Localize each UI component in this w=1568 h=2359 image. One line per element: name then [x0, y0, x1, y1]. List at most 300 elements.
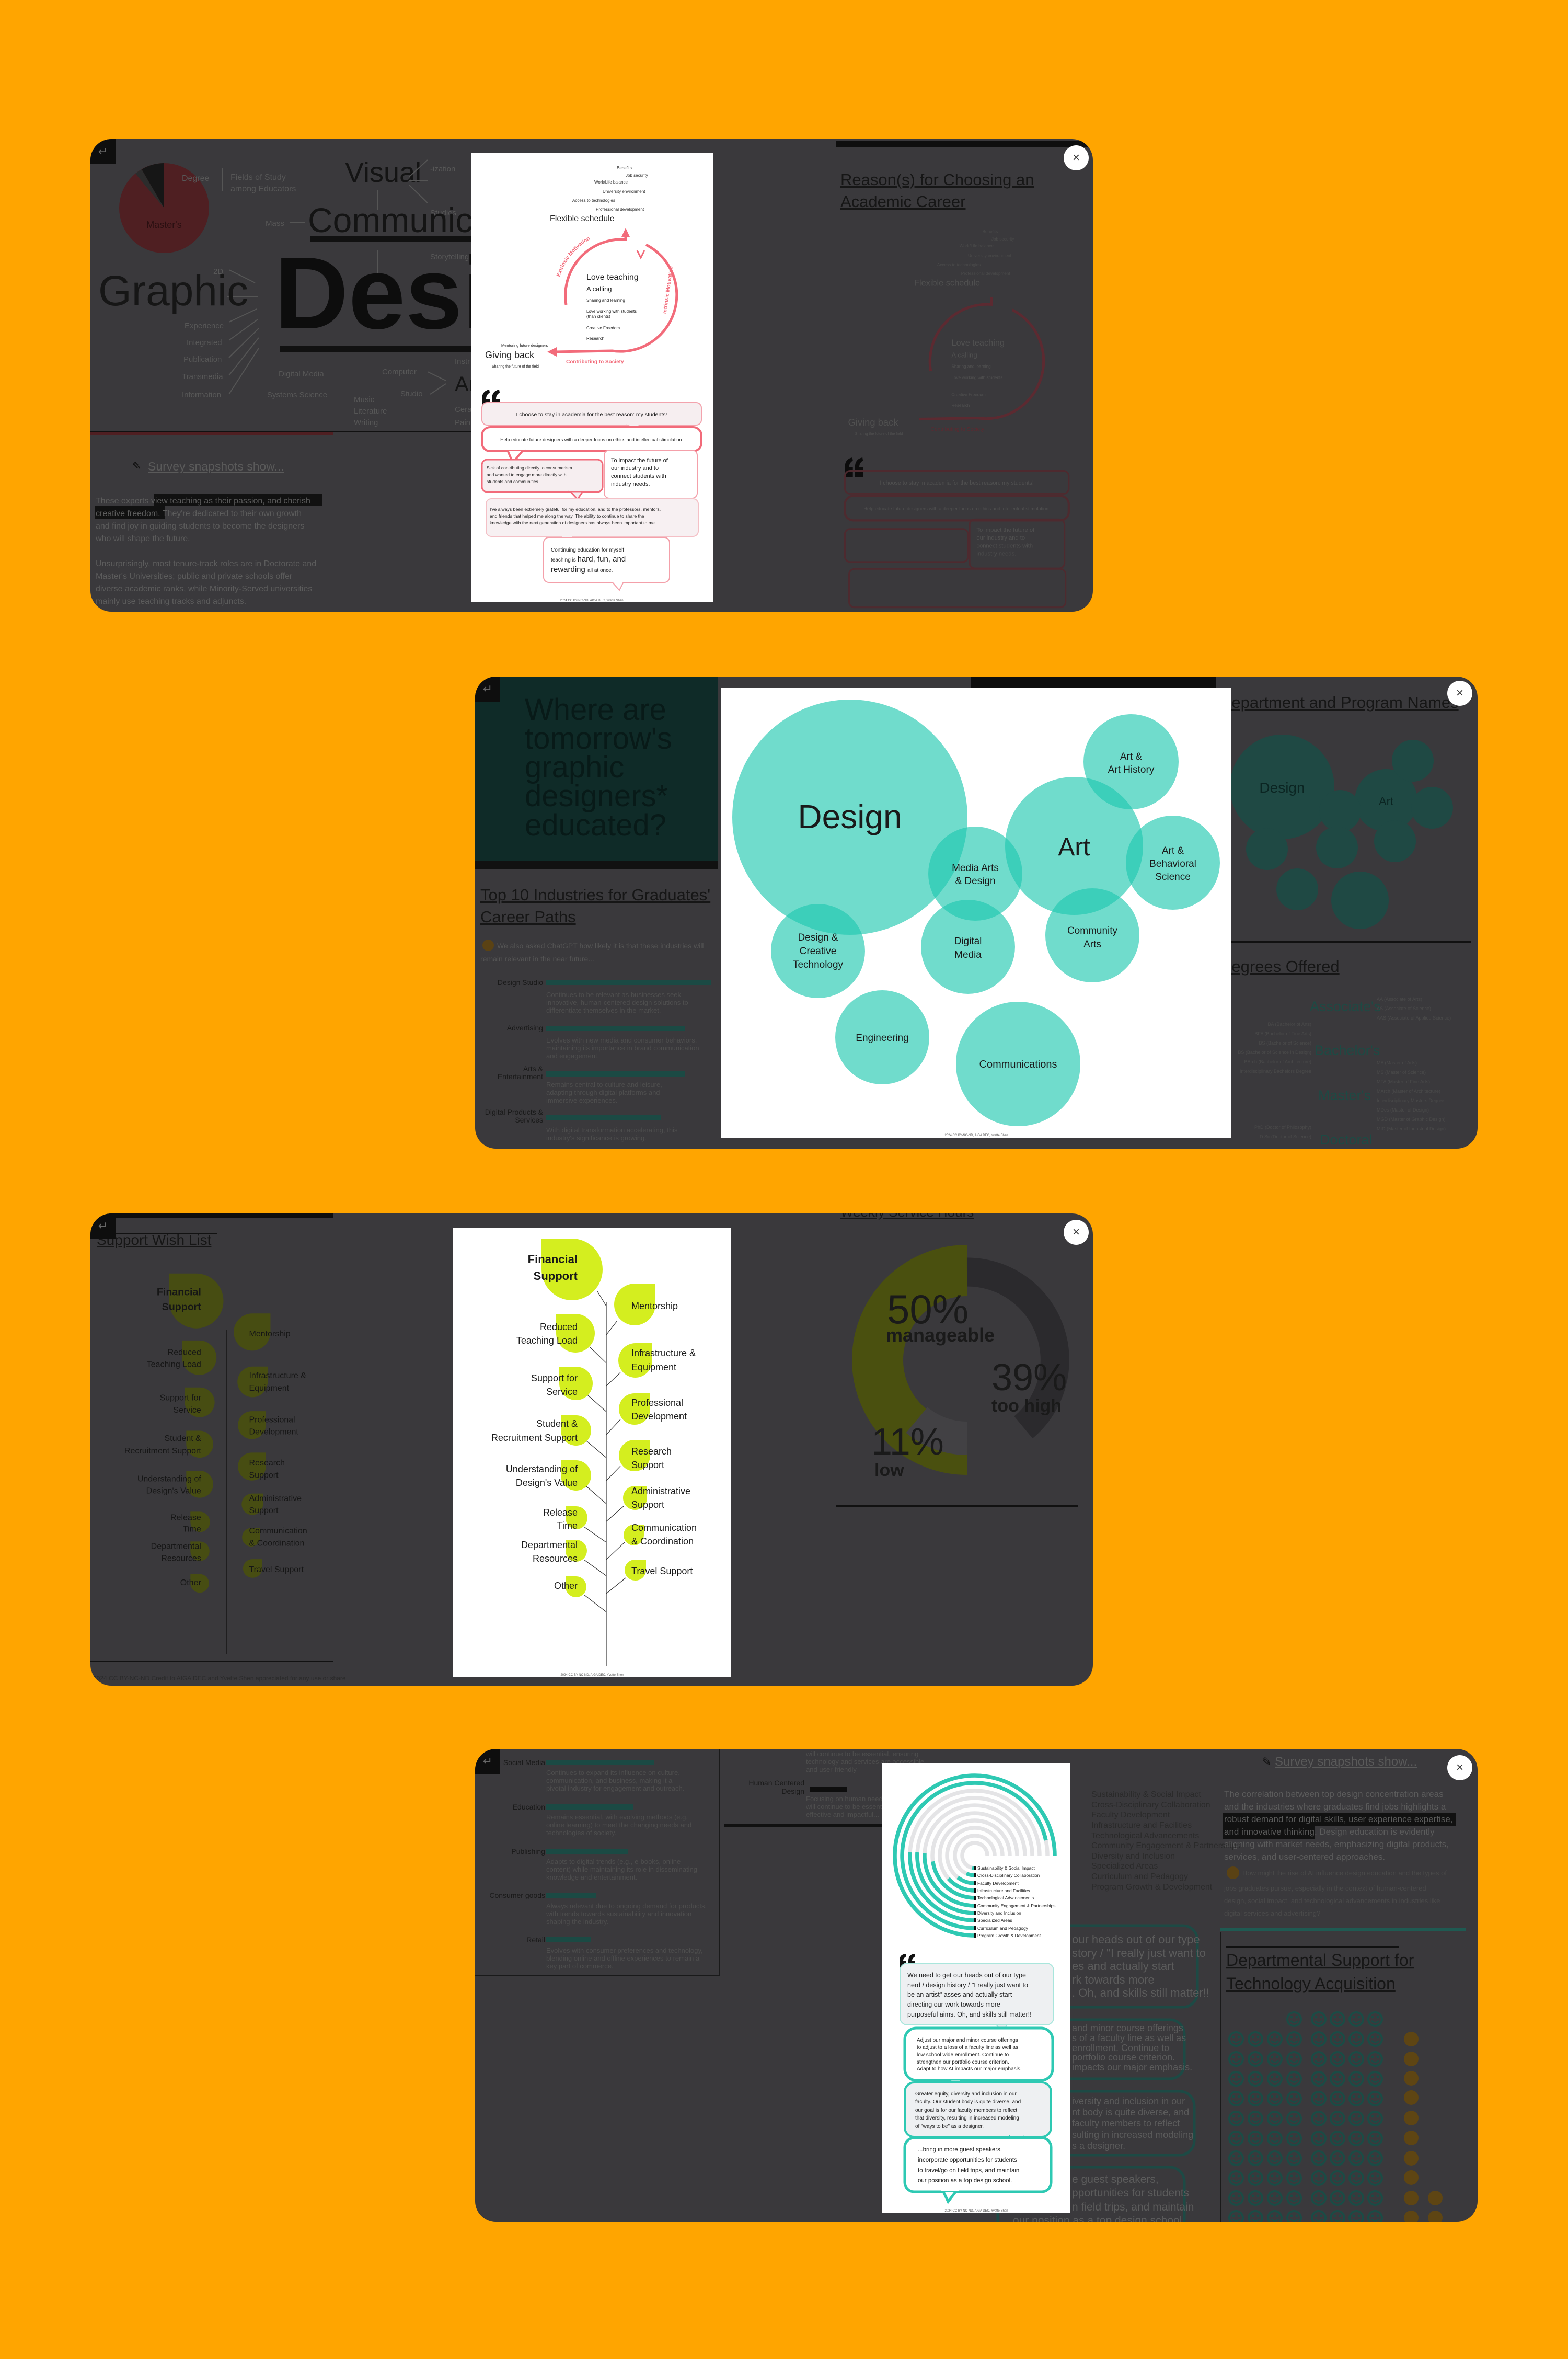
donut chart: weekly service hours: 39%: [991, 1357, 1067, 1399]
left labels: Support: [534, 1269, 578, 1282]
close button: ×: [1456, 1760, 1463, 1774]
stem and branches: [584, 1291, 626, 1666]
degrees offered: BS (Bachelor of Science in Design): [1238, 1050, 1311, 1055]
dim large copy of quotes: Sustainability & Social Impact: [1091, 1790, 1201, 1799]
quote bubble 3: Greater equity, diversity and inclusion in our: [915, 2091, 1017, 2097]
degrees offered: AAS (Associate of Applied Science): [1377, 1015, 1451, 1021]
quote bubble 2: strengthen our portfolio course criterion.: [917, 2059, 1009, 2065]
dim tree copy: Mentorship: [249, 1329, 291, 1338]
dim tree copy: Service: [173, 1405, 201, 1415]
close button: [1447, 681, 1472, 706]
benefits list: Work/Life balance: [594, 180, 628, 185]
degrees offered: MA (Master of Arts): [1377, 1060, 1417, 1066]
chart labels: Curriculum and Pedagogy: [977, 1926, 1029, 1931]
dim large copy of quotes: s of a faculty line as well as: [1072, 2033, 1186, 2043]
right labels: Mentorship: [631, 1301, 678, 1311]
chart labels: Community Engagement & Partnerships: [977, 1903, 1055, 1908]
dim tree copy: Travel Support: [249, 1565, 304, 1574]
department and program names bubble cluster: Art: [1379, 795, 1393, 808]
human centered design row: Focusing on human needs: [806, 1795, 886, 1803]
industry bars continued: with trends towards sustainability and innovation: [546, 1910, 691, 1918]
bubble labels: Digital: [954, 936, 982, 947]
word tree: Graphic Design Communication: [98, 157, 616, 427]
dim tree copy: Time: [183, 1525, 201, 1534]
word tree: Graphic Design Communication: Studio: [400, 390, 423, 398]
poster: reasons for academic career: [471, 153, 713, 602]
degrees offered: Degrees Offered: [1220, 957, 1340, 976]
industry bars continued: blending online and offline experiences to remain a: [546, 1954, 700, 1962]
quote bubble 2: Adjust our major and minor course offerings: [917, 2037, 1018, 2043]
industry bars continued: [475, 1749, 720, 1976]
survey snapshot right panel: [1220, 1755, 1466, 2225]
back icon: [475, 677, 500, 702]
dim copy of motivation diagram: I choose to stay in academia for the best reason: my students!: [880, 480, 1034, 486]
left labels: Departmental: [521, 1540, 578, 1550]
dim copy of motivation diagram: industry needs.: [976, 551, 1016, 557]
human centered design row: Design: [781, 1787, 804, 1795]
teal title panel: designers*: [525, 779, 668, 813]
word tree: Graphic Design Communication: Pain: [455, 418, 470, 427]
quote bubble 3: students and communities.: [487, 479, 539, 484]
love teaching list: A calling: [586, 285, 612, 293]
chart labels: Diversity and Inclusion: [977, 1910, 1021, 1916]
quote bubble 4: connect students with: [611, 473, 666, 479]
bubble labels: [793, 751, 1196, 1070]
quote bubble 2: Help educate future designers with a deeper focus on ethics and intellectual stimulation.: [500, 437, 683, 442]
dimmed background page 3: 2024 CC BY-NC-ND Credit to AIGA DEC and Yvette Shen appreciated for any use or share: [93, 1675, 346, 1682]
survey snapshot right panel: aligning with market needs, emphasizing digital products,: [1224, 1839, 1449, 1849]
word tree: Graphic Design Communication: Design: [274, 236, 616, 350]
right labels: Travel Support: [631, 1566, 693, 1576]
left labels: Recruitment Support: [491, 1433, 578, 1443]
quote bubble 5: [486, 499, 698, 544]
quote mark: [482, 390, 500, 409]
bubble chart: [732, 700, 1220, 1126]
benefits list: Professional development: [596, 207, 644, 212]
top 10 industries panel: Design Studio: [498, 978, 543, 987]
industry bars continued: Education: [513, 1803, 545, 1811]
department and program names bubble cluster: Department and Program Names: [1220, 693, 1459, 712]
donut chart: weekly service hours: low: [874, 1460, 904, 1480]
dim copy of motivation diagram: Work/Life balance: [960, 244, 994, 248]
dim large copy of quotes: Faculty Development: [1091, 1811, 1170, 1819]
top 10 industries panel: Advertising: [507, 1024, 543, 1032]
dim tree copy: Support for: [160, 1393, 201, 1403]
poster: support wish list tree: [453, 1228, 731, 1677]
chart labels: Infrastructure and Facilities: [977, 1888, 1030, 1893]
top 10 industries panel: adapting through digital platforms and: [546, 1089, 660, 1096]
degree labels: [182, 168, 296, 193]
pie chart: degree: [119, 163, 209, 253]
right labels: Development: [631, 1411, 687, 1422]
survey snapshot right panel: robust demand for digital skills, user experience expertise,: [1224, 1814, 1453, 1824]
quote bubble 4: incorporate opportunities for students: [918, 2157, 1017, 2163]
close button: ×: [1073, 151, 1080, 165]
donut chart: weekly service hours: 11%: [871, 1421, 944, 1463]
human centered design row: will continue to be essential...: [805, 1803, 894, 1811]
dim large copy of quotes: Cross-Disciplinary Collaboration: [1091, 1801, 1210, 1810]
dim tree copy: Understanding of: [137, 1474, 201, 1484]
top 10 industries panel: immersive experiences.: [546, 1096, 618, 1104]
dim copy of motivation diagram: Love teaching: [951, 338, 1005, 348]
industry bars continued: Social Media: [503, 1758, 545, 1767]
left labels: Support for: [531, 1373, 578, 1383]
top 10 industries panel: maintaining its importance in brand communication: [546, 1044, 699, 1052]
degrees offered: Master's: [1318, 1087, 1371, 1103]
dim large copy of quotes: faculty members to reflect: [1072, 2118, 1180, 2128]
flexible schedule: Flexible schedule: [550, 214, 615, 223]
dim large copy of quotes: . Oh, and skills still matter!!: [1072, 1986, 1209, 1999]
dim copy of motivation diagram: Help educate future designers with a deeper focus on ethics and intellectual stimulation.: [863, 506, 1050, 511]
dim tree copy: Professional: [249, 1415, 295, 1424]
dim tree copy: Infrastructure &: [249, 1371, 306, 1380]
bubble labels: & Design: [955, 876, 996, 887]
degrees offered: AA (Associate of Arts): [1377, 997, 1422, 1002]
quote bubble 2: Adapt to how AI impacts our major emphasis.: [917, 2066, 1022, 2072]
quote bubble 6: [544, 537, 670, 590]
left labels: Service: [546, 1387, 578, 1397]
dim tree copy: Design's Value: [146, 1486, 201, 1496]
dim large copy of quotes: Curriculum and Pedagogy: [1091, 1872, 1188, 1881]
dim copy of motivation diagram: Job security: [991, 237, 1014, 242]
dim tree copy: Support: [249, 1506, 279, 1515]
giving back: [485, 343, 548, 369]
survey snapshot paragraph: creative freedom. They're dedicated to their own growth: [96, 509, 302, 518]
survey snapshot paragraph: ✎: [132, 461, 141, 472]
bubble labels: Engineering: [856, 1033, 909, 1044]
degrees offered: MS (Master of Science): [1377, 1070, 1426, 1075]
dim tree copy: Research: [249, 1458, 285, 1468]
word tree: Graphic Design Communication: Mass: [266, 219, 284, 228]
survey snapshot paragraph: These experts view teaching as their passion, and cherish: [96, 497, 310, 506]
survey snapshot paragraph: diverse academic ranks, while Minority-Served universities: [96, 585, 312, 593]
quote bubble 4: our industry and to: [611, 465, 659, 472]
benefits list: [572, 166, 648, 212]
word tree: Graphic Design Communication: Ar: [455, 373, 476, 396]
departmental support for technology acquisition: Technology Acquisition: [1226, 1974, 1396, 1993]
word tree: Graphic Design Communication: Information: [182, 391, 221, 399]
bubble labels: Communications: [979, 1059, 1057, 1070]
word tree: Graphic Design Communication: Instr: [455, 357, 470, 366]
human centered design row: and user-friendly: [806, 1766, 857, 1773]
word tree: Graphic Design Communication: Integrated: [187, 338, 222, 347]
human centered design row: will continue to be essential, ensuring: [805, 1750, 918, 1758]
dim tree copy: [124, 1274, 307, 1654]
top 10 industries panel: Evolves with new media and consumer behaviors,: [546, 1036, 697, 1044]
industry bars continued: pivotal industry for engagement and outreach.: [546, 1784, 685, 1792]
quote bubble 4: industry needs.: [611, 481, 650, 487]
dim tree copy: Support: [249, 1470, 279, 1480]
left labels: Design's Value: [516, 1478, 578, 1488]
dim large copy of quotes: sulting in increased modeling: [1072, 2129, 1193, 2140]
right heading: Academic Career: [840, 192, 965, 211]
word tree: Graphic Design Communication: Writing: [354, 418, 378, 427]
quote bubble 1: be an artist" asses and actually start: [907, 1991, 1012, 1998]
dimmed background page 4: [475, 1749, 1466, 2222]
word tree: Graphic Design Communication: Communication: [308, 201, 548, 239]
dim large copy of quotes: Diversity and Inclusion: [1091, 1852, 1175, 1861]
right labels: Support: [631, 1499, 664, 1510]
survey snapshot right panel: digital services and advertising?: [1224, 1909, 1320, 1917]
right labels: Research: [631, 1446, 672, 1457]
quote bubble 2: [905, 2028, 1053, 2090]
bubble labels: Art &: [1120, 751, 1142, 762]
motivation cycle arrows: [547, 228, 678, 357]
left labels: Time: [557, 1520, 578, 1531]
dim large copy of quotes: Infrastructure and Facilities: [1091, 1821, 1192, 1830]
donut chart: weekly service hours: 50%: [887, 1286, 969, 1332]
dim copy of motivation diagram: Contributing to Society: [931, 427, 985, 432]
degrees offered: MDes (Master of Design): [1377, 1107, 1429, 1113]
teal title panel: graphic: [525, 750, 624, 784]
survey snapshot right panel: jobs graduates pursue, especially in the context of human-centered: [1224, 1884, 1426, 1892]
degrees offered: AS (Associate of Science): [1377, 1006, 1431, 1011]
dim large copy of quotes: rk towards more: [1072, 1973, 1155, 1986]
dim large copy of quotes: es and actually start: [1072, 1960, 1174, 1973]
giving back: Giving back: [485, 350, 535, 360]
dim tree copy: Student &: [164, 1434, 201, 1443]
degrees offered: BA (Bachelor of Arts): [1267, 1022, 1311, 1027]
industry bars continued: Consumer goods: [489, 1891, 545, 1899]
survey snapshot right panel: and the industries where graduates find jobs highlights a: [1224, 1802, 1446, 1812]
back icon: ↵: [483, 682, 492, 695]
right labels: [631, 1301, 697, 1576]
top 10 industries panel: Services: [515, 1116, 543, 1124]
bubble labels: Media Arts: [952, 863, 999, 874]
smiley icon grid: [1227, 2009, 1443, 2228]
word tree: Graphic Design Communication: Transmedia: [182, 372, 223, 381]
love teaching list: Research: [586, 336, 604, 341]
dim tree copy: Communication: [249, 1526, 307, 1536]
survey snapshot paragraph: Survey snapshots show...: [148, 460, 284, 473]
close button: ×: [1456, 686, 1463, 700]
degrees offered: MID (Master of Industrial Design): [1377, 1126, 1446, 1131]
survey snapshot right panel: services, and user-centered approaches.: [1224, 1852, 1385, 1862]
quote bubble 4: our position as a top design school.: [918, 2178, 1012, 2184]
dim large copy of quotes: iversity and inclusion in our: [1072, 2096, 1185, 2106]
back icon: ↵: [483, 1755, 492, 1768]
industry bars continued: knowledge and entertainment.: [546, 1873, 637, 1881]
quote bubble 4: [604, 450, 697, 505]
word tree: Graphic Design Communication: Digital Media: [279, 370, 324, 379]
industry bars continued: Publishing: [511, 1847, 545, 1856]
quote bubble 2: [482, 427, 701, 463]
donut chart: weekly service hours: [836, 1204, 1078, 1507]
dim copy of motivation diagram: Research: [951, 403, 970, 408]
departmental support for technology acquisition: Departmental Support for: [1226, 1951, 1414, 1969]
degrees offered: MFA (Master of Fine Arts): [1377, 1079, 1430, 1084]
right heading: Reason(s) for Choosing an: [840, 170, 1034, 189]
benefits list: Access to technologies: [572, 198, 615, 203]
dim copy of motivation diagram: A calling: [951, 351, 977, 359]
degrees offered: MArch (Master of Architecture): [1377, 1089, 1440, 1094]
human centered design row: effective and impactful...: [806, 1811, 879, 1818]
department and program names bubble cluster: [1220, 693, 1471, 943]
quote bubble 3: [905, 2082, 1051, 2145]
chart labels: Program Growth & Development: [977, 1933, 1041, 1938]
dim copy of motivation diagram: Love working with students: [951, 375, 1002, 380]
top 10 industries panel: Continues to be relevant as businesses seek: [546, 991, 681, 999]
quote bubble 3: and wanted to engage more directly with: [487, 472, 567, 477]
dim large copy of quotes: nt body is quite diverse, and: [1072, 2107, 1189, 2117]
love teaching list: (than clients): [586, 314, 610, 319]
survey snapshot right panel: ✎: [1262, 1755, 1271, 1768]
back icon: ↵: [98, 145, 108, 158]
bubble labels: Science: [1155, 872, 1191, 883]
industry bars continued: Always relevant due to ongoing demand for products,: [546, 1902, 707, 1910]
dim tree copy: Release: [170, 1513, 201, 1522]
left labels: Other: [554, 1581, 578, 1591]
teal title panel: [475, 677, 718, 869]
dim copy of motivation diagram: University environment: [968, 254, 1012, 258]
quote bubble 1: We need to get our heads out of our type: [907, 1972, 1026, 1979]
degrees offered: PhD (Doctor of Philosophy): [1254, 1125, 1311, 1130]
quote bubble 5: and friends that helped me along the way. The ability to continue to share the: [490, 513, 644, 519]
quote bubble 1: [900, 1963, 1054, 2034]
chart labels: Cross-Disciplinary Collaboration: [977, 1873, 1040, 1878]
footer credit: 2024 CC BY-NC-ND, AIGA DEC, Yvette Shen: [560, 1674, 624, 1677]
quote bubble 4: to travel/go on field trips, and maintain: [918, 2168, 1019, 2174]
quote bubble 3: that diversity, resulting in increased modeling: [915, 2115, 1019, 2121]
dim large copy of quotes: and minor course offerings: [1072, 2023, 1183, 2033]
bubble labels: Art &: [1162, 845, 1184, 856]
right heading: [836, 141, 1097, 211]
top 10 industries panel: and engagement.: [546, 1052, 599, 1060]
bubble labels: Art History: [1108, 764, 1155, 775]
bubble labels: Art: [1058, 833, 1090, 861]
degree labels: Degree: [182, 174, 210, 183]
degrees offered: D.Sc (Doctor of Science): [1260, 1134, 1311, 1139]
industry bars continued: shaping the industry.: [546, 1918, 608, 1926]
dim copy of motivation diagram: our industry and to: [976, 535, 1025, 541]
love teaching list: Love teaching: [586, 273, 639, 282]
footer credit: 2024 CC BY-NC-ND, AIGA DEC, Yvette Shen: [944, 1134, 1008, 1137]
dim large copy of quotes: Technological Advancements: [1091, 1831, 1199, 1840]
card 4: future directions: [475, 1749, 1478, 2222]
quote bubble 6: rewarding all at once.: [551, 565, 613, 574]
card 2: department and program names: [475, 677, 1478, 1149]
quote bubble 6: teaching is hard, fun, and: [551, 555, 626, 564]
dim copy of motivation diagram: Sharing the future of the field: [855, 432, 903, 436]
support wish list heading: Support Wish List: [97, 1232, 212, 1248]
left labels: Understanding of: [506, 1464, 578, 1474]
poster: department and program name bubbles: [721, 688, 1231, 1138]
quote bubble 2: to adjust to a loss of a faculty line as well as: [917, 2045, 1018, 2051]
top 10 industries panel: Digital Products &: [485, 1108, 544, 1116]
top 10 industries panel: innovative, human-centered design solutions to: [546, 999, 688, 1006]
teal title panel: educated?: [525, 808, 666, 842]
degree labels: Fields of Study: [230, 173, 286, 182]
teal title panel: Where are: [525, 693, 666, 727]
leaves: [541, 1239, 655, 1597]
dim large copy of quotes: impacts our major emphasis.: [1072, 2062, 1192, 2072]
dim copy of motivation diagram: Access to technologies: [937, 262, 981, 267]
word tree: Graphic Design Communication: Graphic: [98, 267, 248, 315]
back icon: [90, 139, 116, 164]
pie chart: degree: Master's: [146, 220, 182, 230]
dim large copy of quotes: enrollment. Continue to: [1072, 2043, 1169, 2053]
quote bubble 3: of "ways to be" as a designer.: [915, 2124, 984, 2129]
top 10 industries panel: We also asked ChatGPT how likely it is that these industries will: [497, 942, 704, 950]
back icon: [90, 1213, 116, 1239]
dimmed background page 1: [90, 141, 1088, 609]
chart labels: Technological Advancements: [977, 1895, 1034, 1900]
chart labels: Sustainability & Social Impact: [977, 1865, 1035, 1871]
dim copy of motivation diagram: [845, 230, 1069, 608]
dimmed background page 3: [90, 1213, 1078, 1682]
quote bubble 1: directing our work towards more: [907, 2001, 1000, 2008]
dim tree copy: Other: [180, 1578, 201, 1587]
left labels: Financial: [528, 1253, 578, 1266]
quote bubble 3: our goal is for our faculty members to reflect: [915, 2108, 1017, 2113]
dim tree copy: Equipment: [249, 1383, 290, 1393]
dim tree copy: Teaching Load: [147, 1360, 201, 1369]
industry bars continued: Retail: [526, 1936, 545, 1944]
dim large copy of quotes: n field trips, and maintain: [1072, 2201, 1194, 2213]
close button: ×: [1073, 1225, 1080, 1239]
quote bubble 2: low school wide enrollment. Continue to: [917, 2052, 1009, 2058]
quote bubble 1: purposeful aims. Oh, and skills still matter!!: [907, 2011, 1032, 2018]
survey snapshot right panel: and innovative thinking. Design education is evidently: [1224, 1827, 1435, 1837]
top 10 industries panel: [480, 886, 711, 1142]
quote bubble 3: [482, 460, 603, 499]
footer credit: 2024 CC BY-NC-ND, AIGA DEC, Yvette Shen: [944, 2209, 1008, 2213]
survey snapshot paragraph: who will shape the future.: [95, 534, 190, 543]
dim large copy of quotes: [998, 1790, 1240, 2235]
motivation cycle arrows: Extrinsic Motivation: [556, 237, 590, 277]
top 10 industries panel: Top 10 Industries for Graduates': [480, 886, 710, 904]
word tree: Graphic Design Communication: Storytelling: [430, 253, 469, 261]
degrees offered: MGD (Master of Graphic Design): [1377, 1117, 1446, 1122]
industry bars continued: Continues to expand its influence on culture,: [546, 1769, 680, 1777]
top 10 industries panel: differentiate themselves in the market.: [546, 1006, 661, 1014]
dim tree copy: Departmental: [151, 1542, 201, 1551]
industry bars continued: key part of commerce.: [546, 1962, 614, 1970]
dim large copy of quotes: pportunities for students: [1072, 2187, 1189, 2199]
quote bubble 3: Sick of contributing directly to consumerism: [487, 465, 572, 471]
dim tree copy: Administrative: [249, 1494, 302, 1503]
degrees offered: Interdisciplinary Masters Degree: [1377, 1098, 1444, 1103]
degree labels: among Educators: [230, 185, 296, 193]
quote mark: [900, 1954, 915, 1969]
industry bars continued: communication, and business, making it a: [546, 1777, 673, 1784]
dim large copy of quotes: our heads out of our type: [1072, 1933, 1200, 1946]
left labels: Student &: [536, 1418, 578, 1429]
dim copy of motivation diagram: Flexible schedule: [914, 279, 980, 288]
right labels: Support: [631, 1460, 664, 1470]
back icon: [475, 1749, 500, 1774]
dim tree copy: Financial: [157, 1287, 201, 1298]
degrees offered: BFA (Bachelor of Fine Arts): [1254, 1031, 1311, 1036]
dim tree copy: Resources: [161, 1554, 201, 1563]
human centered design row: Human Centered: [748, 1779, 804, 1787]
dim copy of motivation diagram: Benefits: [983, 230, 998, 234]
industry bars continued: Adapts to digital trends (e.g., e-books, online: [546, 1858, 681, 1865]
quote bubble 3: faculty. Our student body is quite diverse, and: [915, 2099, 1021, 2105]
quote bubble 5: knowledge with the next generation of designers has always been important to me.: [490, 520, 656, 525]
degrees offered: Doctoral: [1320, 1132, 1373, 1148]
quote bubble 1: [482, 403, 701, 433]
bubble labels: Community: [1067, 925, 1118, 936]
word tree: Graphic Design Communication: Publication: [183, 355, 222, 364]
top 10 industries panel: Career Paths: [480, 908, 576, 926]
industry bars continued: Remains essential, with evolving methods (e.g.: [546, 1813, 688, 1821]
quote bubble 4: To impact the future of: [611, 457, 668, 464]
dim large copy of quotes: portfolio course criterion.: [1072, 2052, 1175, 2063]
bubble labels: Design: [798, 798, 902, 835]
left labels: Teaching Load: [516, 1335, 578, 1346]
quote bubble 4: ...bring in more guest speakers,: [918, 2147, 1002, 2153]
